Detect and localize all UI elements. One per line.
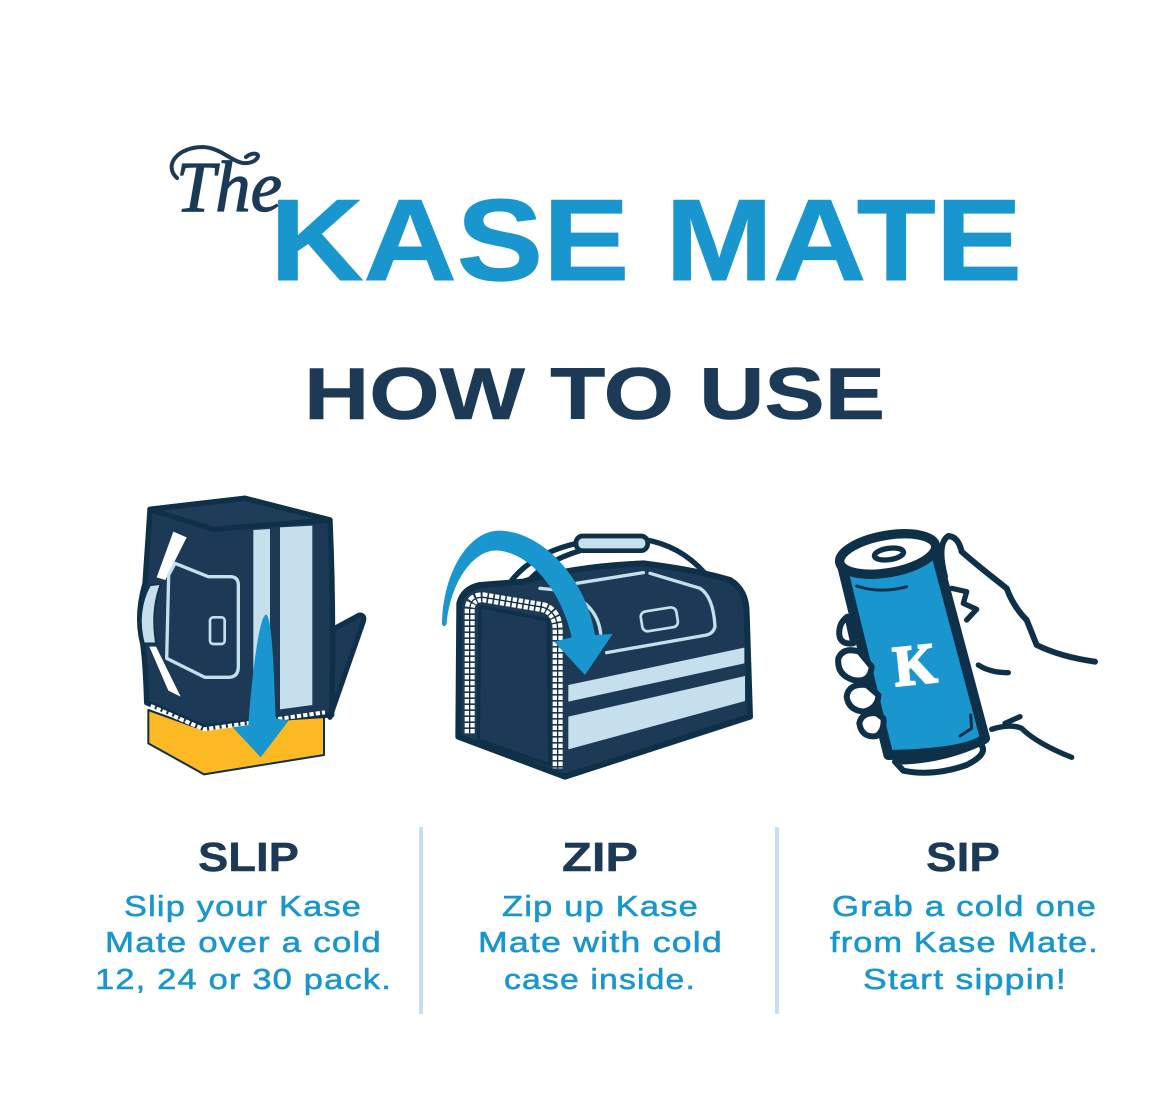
title: The (172, 147, 282, 227)
can tab (874, 546, 904, 562)
step 3 description: from Kase Mate. (830, 927, 1099, 959)
step 1 description: Slip your Kase (124, 891, 362, 923)
curved arrow (442, 531, 613, 675)
lid panel outline (540, 573, 715, 653)
handle grip (576, 536, 648, 551)
thumb and wrist (942, 536, 1095, 662)
end panel (478, 607, 550, 765)
step 2 description: Mate with cold (478, 927, 723, 959)
script swash (172, 147, 258, 178)
step 3 description: Grab a cold one (832, 891, 1097, 923)
down arrow (233, 614, 289, 757)
fingers (838, 617, 884, 736)
step 2 description (478, 891, 723, 996)
step 3 description (830, 891, 1099, 996)
title: KASE MATE: KASE MATE (270, 175, 1022, 305)
step 3 description: Start sippin! (863, 964, 1067, 996)
light stripes (253, 526, 312, 715)
case lid (150, 498, 330, 529)
yellow box (148, 710, 324, 774)
can bottom rim (895, 743, 983, 773)
zipper centre line (470, 597, 558, 768)
step 3 heading: SIP (926, 834, 1000, 880)
step 2 description: Zip up Kase (502, 891, 699, 923)
step 2 description: case inside. (504, 964, 696, 996)
zipper stitching (470, 597, 558, 768)
divider 1 (419, 827, 423, 1014)
bag body (458, 563, 750, 777)
can highlights (857, 586, 972, 736)
side handle (210, 617, 225, 644)
top handle (640, 607, 679, 632)
zipper stitching (151, 706, 325, 729)
icon: case slipping over box (140, 498, 364, 774)
side panel outline (167, 563, 238, 677)
left strap (149, 532, 187, 697)
step 1 description (95, 891, 392, 996)
can top (836, 527, 939, 581)
heading: HOW TO USE: HOW TO USE (304, 354, 885, 435)
step 1 description: 12, 24 or 30 pack. (95, 964, 392, 996)
icon: hand holding can (836, 527, 1095, 773)
rear flap (330, 615, 364, 717)
case body (140, 498, 333, 727)
can body (843, 550, 985, 755)
icon: cooler bag being zipped (442, 531, 750, 777)
divider 2 (775, 827, 779, 1014)
light stripes (568, 648, 745, 749)
K logo: K (890, 632, 940, 699)
step 1 heading: SLIP (198, 834, 299, 880)
step 2 heading: ZIP (562, 834, 638, 880)
carry handle (508, 539, 705, 585)
step 1 description: Mate over a cold (105, 927, 382, 959)
palm creases (952, 588, 1072, 757)
strap grip (141, 584, 161, 643)
script word: The (176, 147, 282, 227)
